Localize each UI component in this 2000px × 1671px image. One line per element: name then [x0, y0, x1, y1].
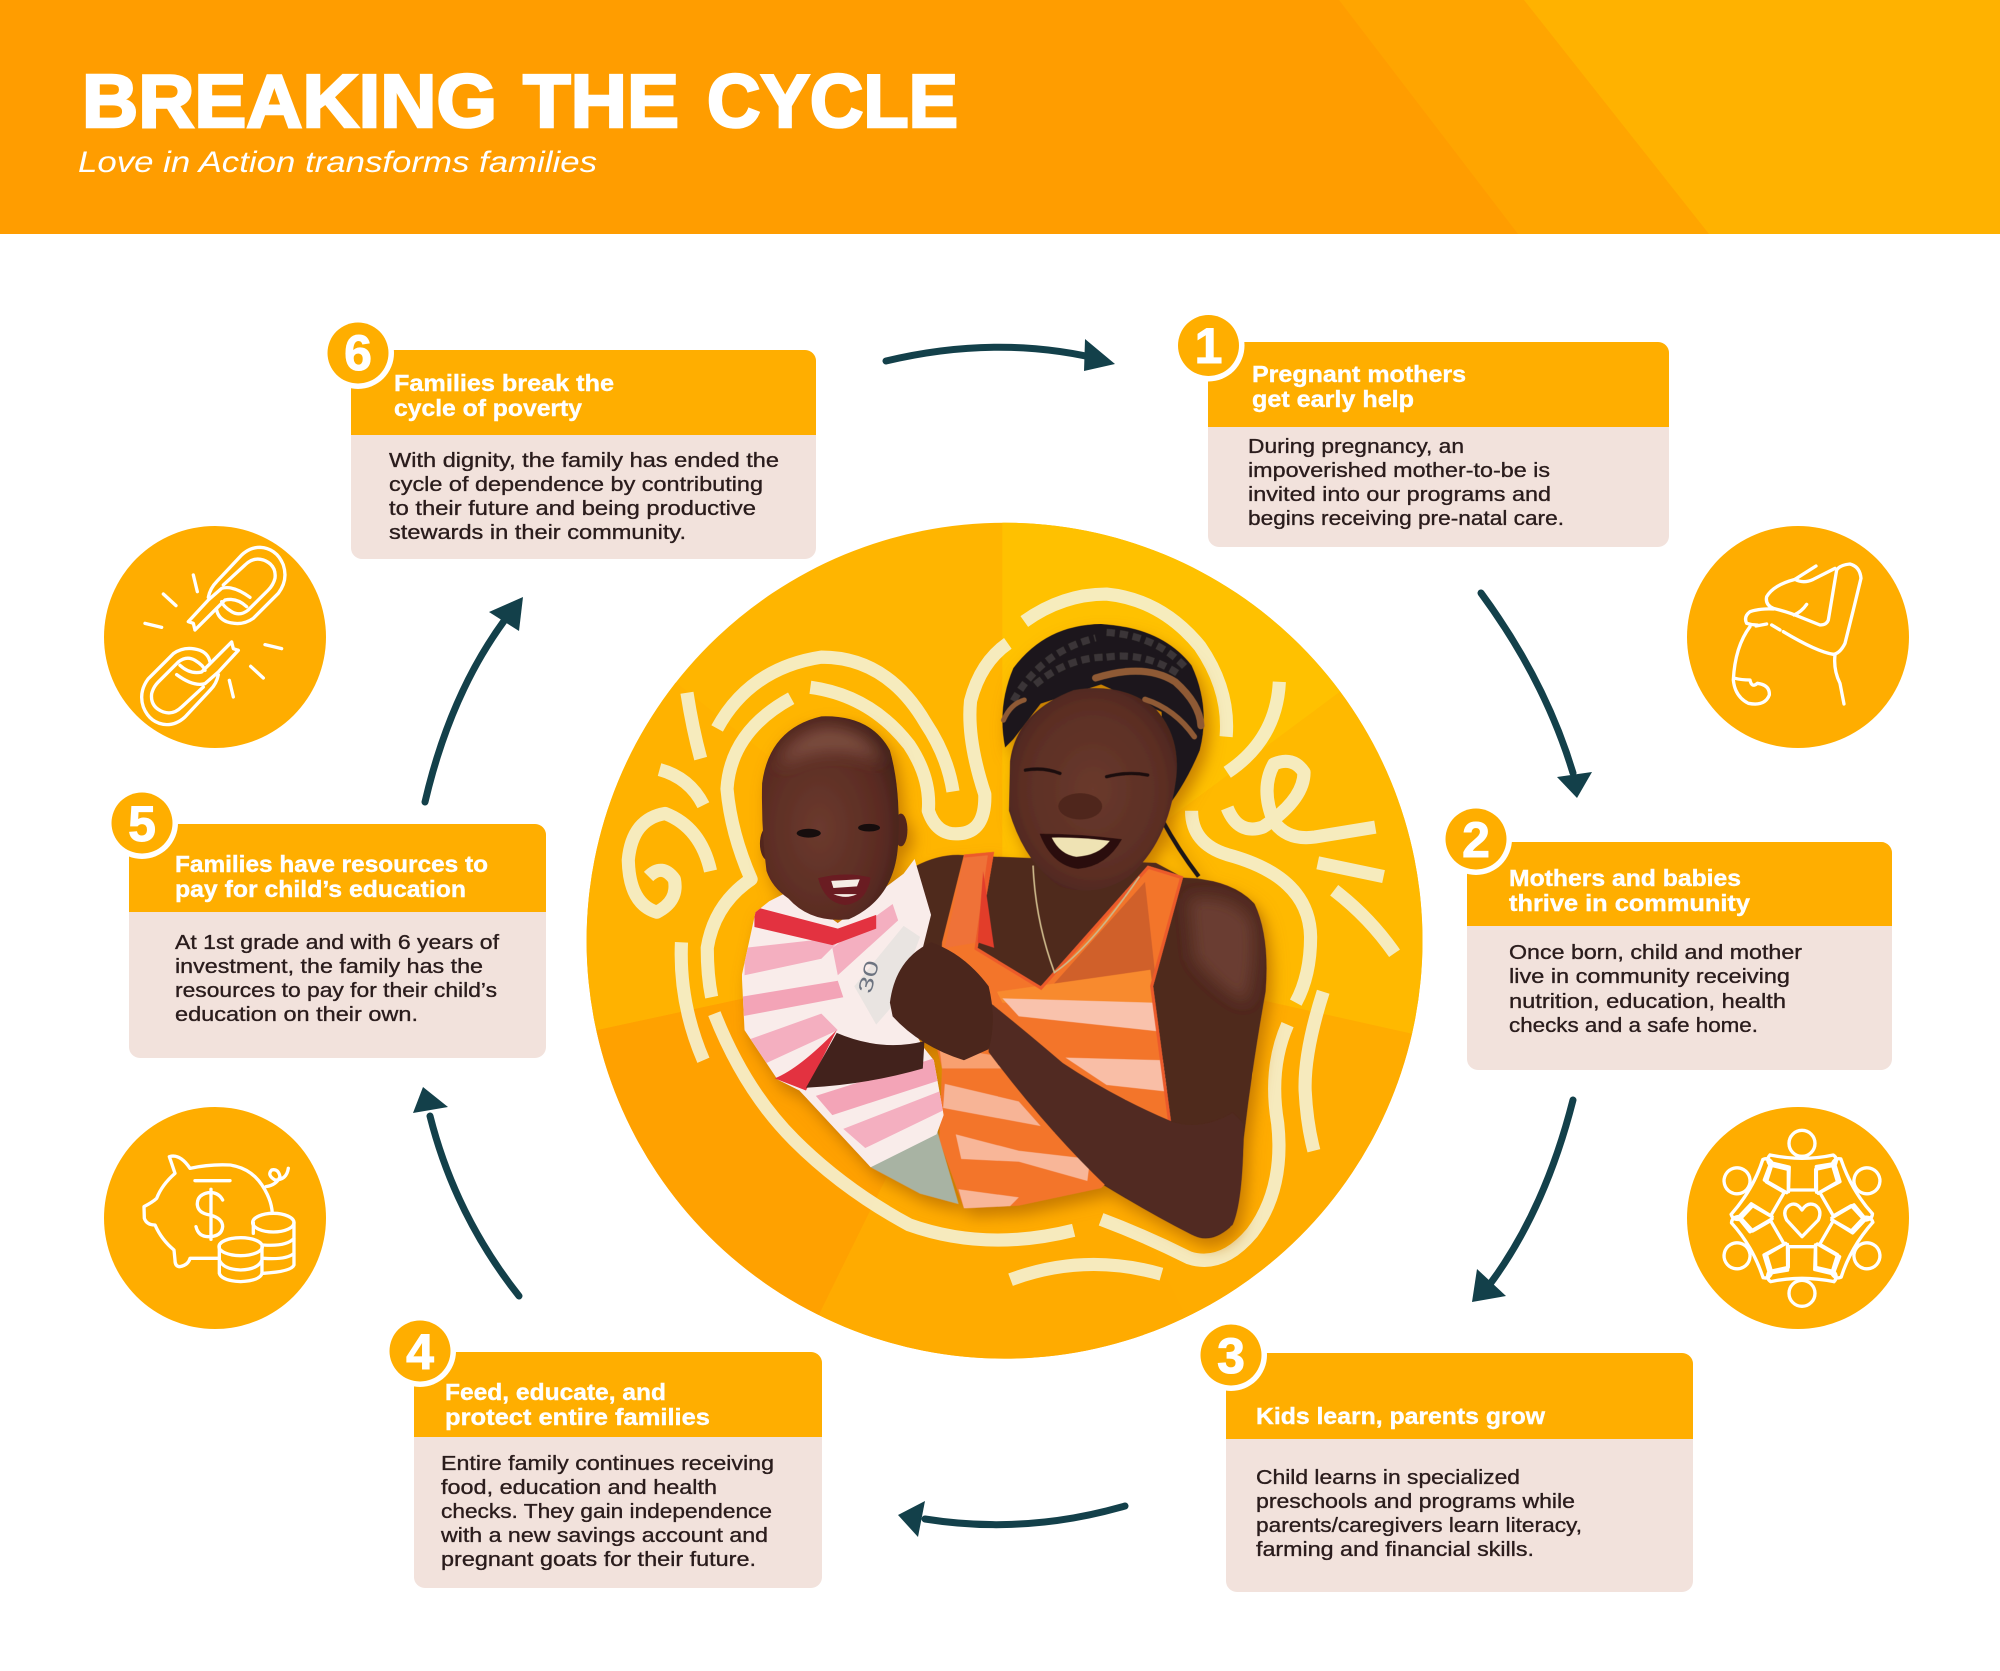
step 3 text: [1256, 1466, 1582, 1561]
step 4 heading: protect entire families: [445, 1404, 710, 1430]
step 5 text: At 1st grade and with 6 years of: [175, 931, 499, 954]
step 2 heading: thrive in community: [1509, 890, 1750, 916]
baby's scalp highlight: [780, 728, 882, 767]
step 5 heading: pay for child’s education: [175, 876, 466, 902]
mother's tank top: [931, 849, 1189, 1217]
step 2 text: nutrition, education, health: [1509, 990, 1786, 1013]
step 3 text: Child learns in specialized: [1256, 1466, 1520, 1489]
step 1 text: begins receiving pre-natal care.: [1248, 507, 1564, 530]
step 2 heading: [1509, 865, 1750, 916]
subtitle: Love in Action transforms families: [78, 146, 597, 179]
central circle with photo: [569, 515, 1458, 1365]
baby's sleeve: [775, 1030, 837, 1090]
arrow: 6 to 1: [886, 339, 1115, 371]
step 1 text: During pregnancy, an: [1248, 435, 1464, 458]
baby's shirt: [734, 855, 953, 1184]
arrow: 4 to 5: [413, 1087, 519, 1296]
step 4 text: pregnant goats for their future.: [441, 1548, 756, 1571]
step 4 badge: 4: [406, 1324, 434, 1380]
title: THE: [523, 59, 679, 143]
panel: step 1: [1172, 310, 1669, 547]
step 3 text: parents/caregivers learn literacy,: [1256, 1514, 1582, 1537]
necklace: [1033, 866, 1139, 973]
baby's pants: [871, 1129, 958, 1204]
mother's forearm: [989, 1002, 1244, 1238]
mother's chest strap: [978, 871, 994, 948]
icon: broken chain: [104, 526, 326, 748]
step 4 text: food, education and health: [441, 1476, 717, 1499]
title: [82, 59, 958, 143]
step 1 badge: [1172, 310, 1244, 382]
step 1 heading: get early help: [1252, 386, 1414, 412]
step 4 text: with a new savings account and: [440, 1524, 768, 1547]
step 2 text: live in community receiving: [1509, 965, 1790, 988]
step 6 text: stewards in their community.: [389, 521, 686, 544]
step 5 text: [175, 931, 499, 1026]
arrow: 1 to 2: [1481, 593, 1592, 798]
panel: step 5: [106, 787, 546, 1058]
mother's pigtail: [1163, 821, 1199, 877]
panel: step 3: [1195, 1319, 1693, 1592]
arrow: 5 to 6: [425, 597, 523, 802]
baby's teeth: [831, 879, 860, 897]
arrow: 2 to 3: [1472, 1100, 1573, 1302]
step 6 heading: Families break the: [394, 370, 614, 396]
arrow: 3 to 4: [898, 1501, 1125, 1537]
squiggle lines: [628, 594, 1395, 1280]
braids: [1096, 671, 1201, 726]
step 5 text: education on their own.: [175, 1003, 418, 1026]
baby's eyes: [797, 824, 880, 838]
step 2 text: checks and a safe home.: [1509, 1014, 1758, 1037]
mother's shoulder highlight: [1189, 898, 1254, 1003]
mother's hand: [890, 942, 993, 1060]
step 6 text: With dignity, the family has ended the: [389, 449, 779, 472]
step 3 text: farming and financial skills.: [1256, 1538, 1534, 1561]
step 4 badge: [384, 1315, 456, 1387]
step 3 badge: 3: [1217, 1328, 1245, 1384]
icon: piggy bank and coins: [104, 1107, 326, 1329]
mother's eyes: [1025, 769, 1148, 777]
step 5 heading: [175, 851, 488, 902]
step 3 heading: Kids learn, parents grow: [1256, 1403, 1545, 1429]
step 2 text: [1509, 941, 1802, 1037]
step 3 text: preschools and programs while: [1256, 1490, 1575, 1513]
step 2 badge: [1440, 803, 1512, 875]
step 4 text: checks. They gain independence: [441, 1500, 772, 1523]
baby's ears: [760, 813, 907, 860]
title: BREAKING: [82, 59, 497, 143]
step 5 text: resources to pay for their child’s: [175, 979, 497, 1002]
mother's body: [915, 855, 1267, 1239]
panel: step 6: [322, 317, 816, 559]
shirt print: 30: [854, 958, 884, 996]
step 2 text: Once born, child and mother: [1509, 941, 1802, 964]
mother's teeth: [1052, 838, 1110, 857]
panel: step 4: [384, 1315, 822, 1588]
mother's mouth: [1040, 834, 1122, 869]
step 1 text: [1248, 435, 1564, 530]
mother's nose: [1058, 793, 1102, 819]
step 5 badge: [106, 787, 178, 859]
step 2 badge: 2: [1462, 812, 1490, 868]
baby's arm: [806, 1033, 924, 1088]
step 5 heading: Families have resources to: [175, 851, 488, 877]
step 4 heading: [445, 1379, 710, 1430]
step 3 badge: [1195, 1319, 1267, 1391]
photo: mother and baby: [734, 624, 1267, 1239]
icon: pregnant mother: [1687, 526, 1909, 748]
step 2 heading: Mothers and babies: [1509, 865, 1741, 891]
step 1 text: impoverished mother-to-be is: [1248, 459, 1550, 482]
step 6 heading: cycle of poverty: [394, 395, 582, 421]
step 6 badge: [322, 317, 394, 389]
step 6 text: cycle of dependence by contributing: [389, 473, 763, 496]
step 6 text: to their future and being productive: [389, 497, 756, 520]
step 6 text: [389, 449, 779, 544]
mother's face: [1009, 688, 1177, 891]
step 1 heading: [1252, 361, 1466, 412]
step 4 text: [440, 1452, 774, 1571]
panel: step 2: [1440, 803, 1892, 1070]
step 5 badge: 5: [128, 796, 156, 852]
step 1 badge: 1: [1195, 318, 1222, 374]
header banner: [0, 0, 2000, 234]
step 4 heading: Feed, educate, and: [445, 1379, 666, 1405]
baby's head: [762, 716, 899, 920]
baby's mouth: [818, 874, 871, 905]
title: CYCLE: [707, 59, 958, 143]
step 1 text: invited into our programs and: [1248, 483, 1551, 506]
step 5 text: investment, the family has the: [175, 955, 483, 978]
step 6 badge: 6: [344, 325, 372, 381]
step 4 text: Entire family continues receiving: [441, 1452, 774, 1475]
mother's hair: [1002, 624, 1204, 808]
icon: community circle: [1687, 1107, 1909, 1329]
step 1 heading: Pregnant mothers: [1252, 361, 1466, 387]
step 6 heading: [394, 370, 614, 421]
